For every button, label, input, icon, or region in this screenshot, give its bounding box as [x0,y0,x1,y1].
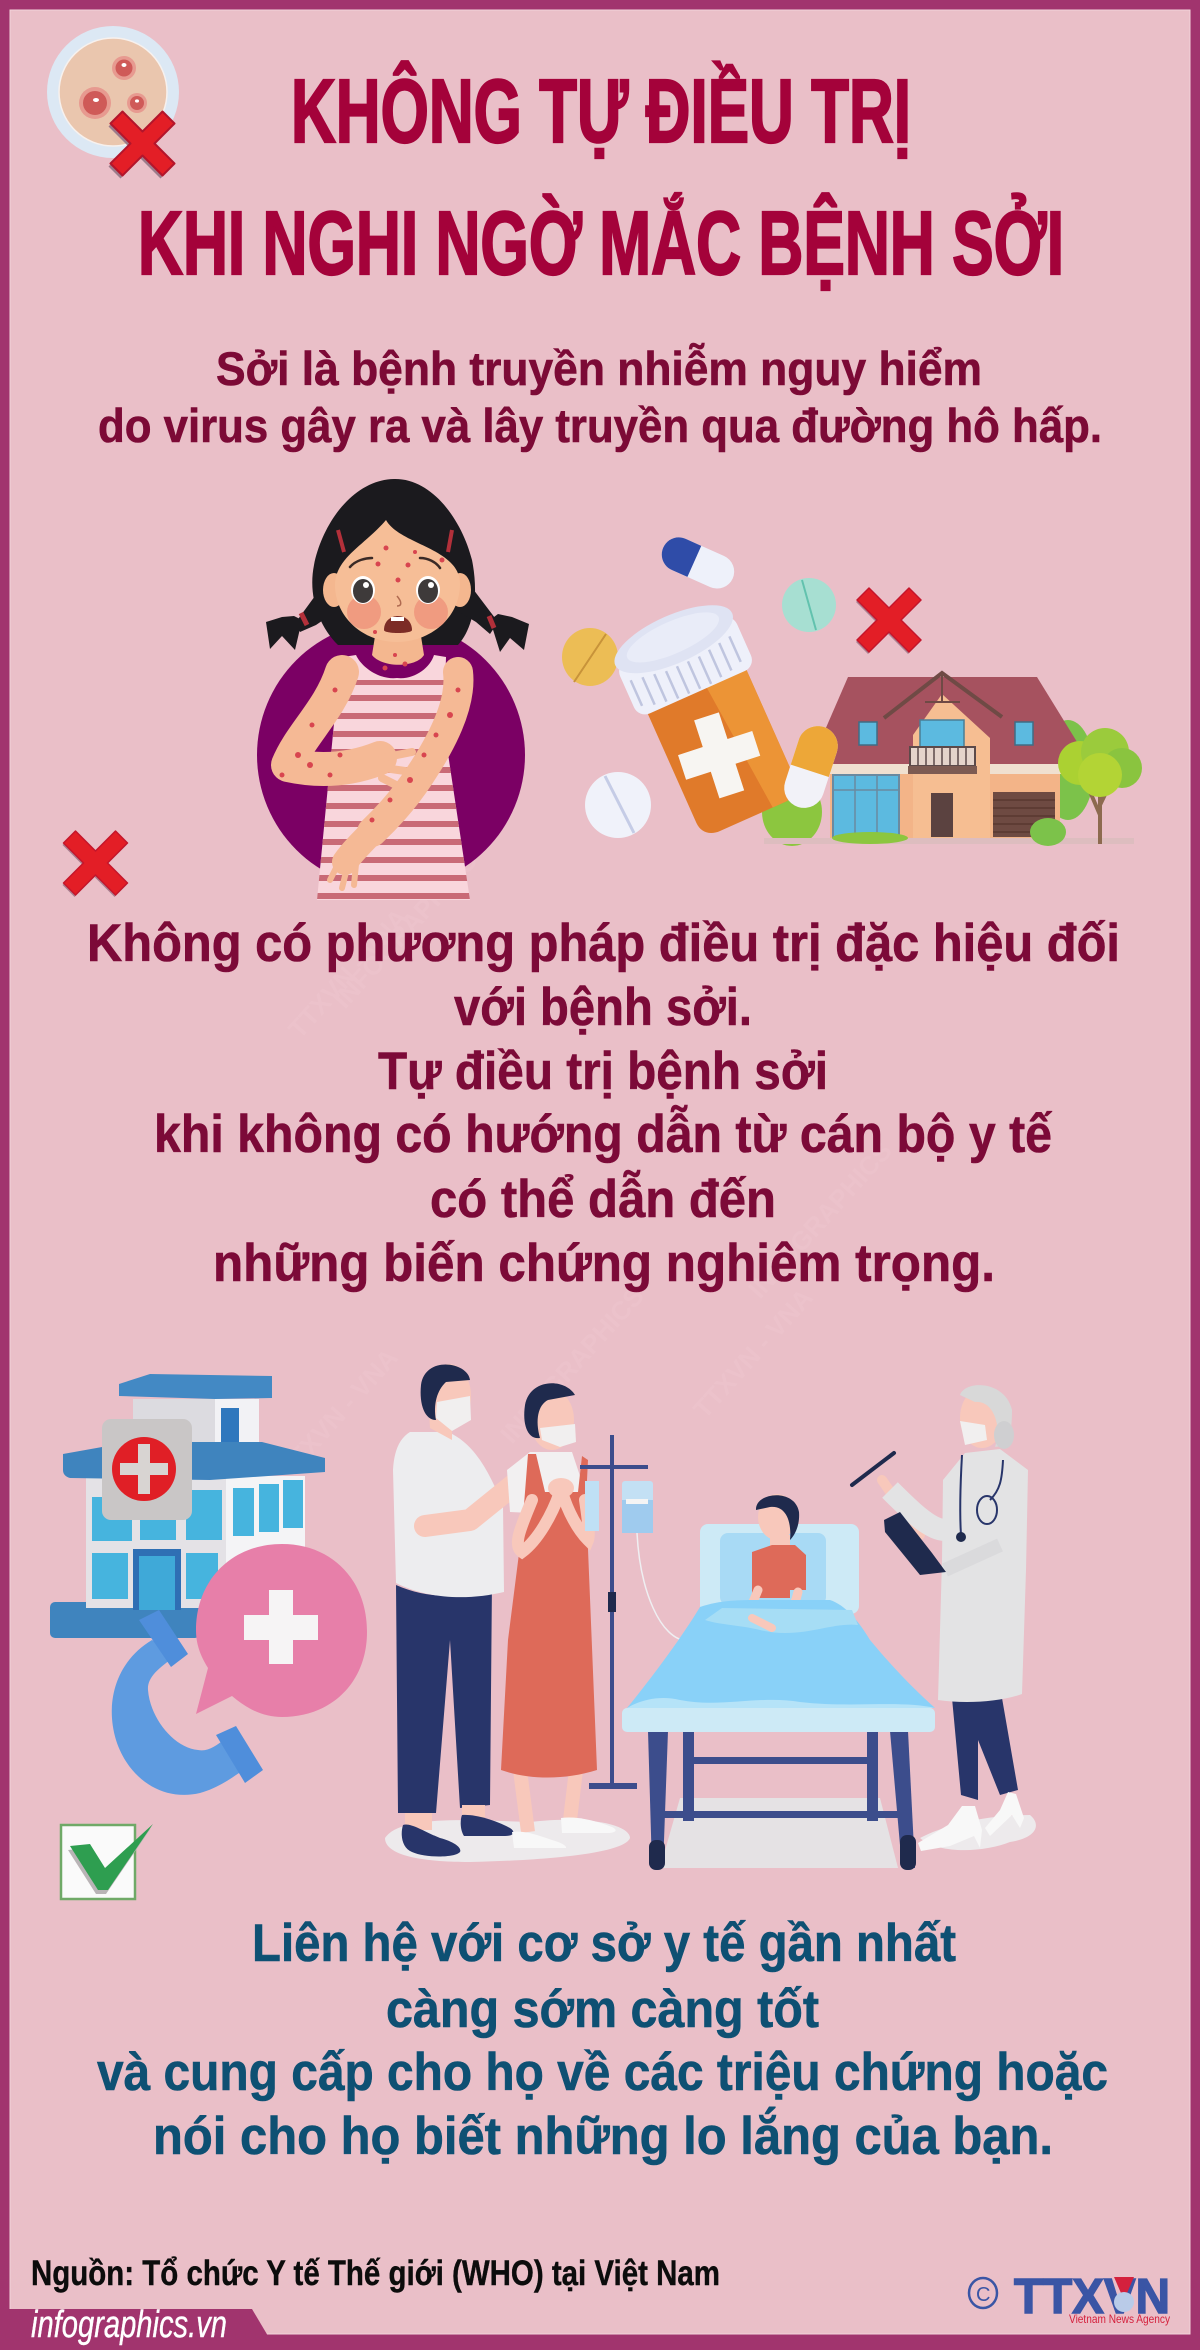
intro text: do virus gây ra và lây truyền qua đường hô hấp. [98,399,1102,452]
middle warning text: những biến chứng nghiêm trọng. [213,1234,995,1293]
illustration: child in hospital bed [622,1494,935,1870]
middle warning text [87,914,1120,1293]
woman blouse [507,1452,588,1515]
middle warning text: với bệnh sởi. [454,978,752,1037]
advice text [97,1914,1108,2166]
floor shadow [385,1820,630,1862]
illustration: hospital building [50,1374,325,1638]
floor shadow [660,1798,898,1868]
balcony [910,747,975,766]
woman head [530,1390,574,1450]
orange capsule [779,721,843,813]
advice text: và cung cấp cho họ về các triệu chứng hoặc [97,2043,1108,2102]
faint watermarks: TTXVN - VNA [282,902,414,1044]
face [335,520,460,642]
roof [812,677,1082,768]
neck and ears [372,630,424,665]
woman arms [518,1492,589,1552]
back bushes [1042,720,1094,820]
lab coat [938,1449,1028,1702]
windows [92,1480,303,1599]
illustration: house [762,673,1142,846]
footer tab: infographics.vn: infographics.vn [31,2304,227,2346]
walls [830,740,1060,844]
stethoscope [960,1455,1003,1535]
yellow pill [562,628,618,686]
middle warning text: khi không có hướng dẫn từ cán bộ y tế [154,1104,1052,1164]
man head [428,1395,452,1440]
arms [288,672,458,888]
front door [931,793,953,837]
faint watermarks: INFOGRAPHICS [327,846,483,1014]
icon: telephone handset [112,1610,263,1795]
logo: TTXVN: C [976,2284,990,2306]
title: KHÔNG TỰ ĐIỀU TRỊ [291,60,911,162]
clipboard [884,1512,946,1575]
advice text: nói cho họ biết những lo lắng của bạn. [153,2106,1053,2166]
pen [852,1453,894,1485]
illustration: parents with masks [385,1364,630,1862]
man pants [396,1580,492,1813]
middle warning text: có thể dẫn đến [430,1169,776,1229]
blue capsule [656,532,740,594]
intro text: Sởi là bệnh truyền nhiễm nguy hiểm [216,342,982,395]
icon: skin rash with red cross [47,26,179,178]
faint watermarks: INFOGRAPHICS [494,1281,650,1449]
base slab [50,1602,200,1638]
middle warning text: Tự điều trị bệnh sởi [378,1042,828,1101]
medicine bottle [605,591,811,842]
illustration: doctor with clipboard [852,1385,1036,1851]
woman legs [520,1770,576,1832]
advice text: Liên hệ với cơ sở y tế gần nhất [252,1914,956,1973]
woman shoes [512,1832,566,1848]
illustration: girl with measles rash [257,479,529,905]
purple circle backdrop [257,621,525,889]
rash spots [280,546,460,822]
faint watermarks: INFOGRAPHICS [742,1136,898,1304]
mattress [622,1708,935,1732]
icon: red cross left [62,831,128,897]
white pill [585,772,651,838]
illustration: IV drip stand [580,1435,733,1789]
shadow [920,1815,1036,1850]
upper window [920,720,964,750]
high heel shoes [918,1806,982,1851]
arm [882,1480,920,1535]
cross sign [102,1419,192,1520]
woman dress [501,1454,597,1778]
top roof [119,1374,272,1399]
icon: green check box [61,1824,153,1899]
small dormer windows [859,722,877,745]
icon: pink speech bubble with cross [196,1544,367,1717]
faint watermarks: TTXVN - VNA [272,1342,404,1484]
teal pill [782,578,836,632]
headboard and pillow [700,1524,859,1614]
faint watermarks: TTXVN - VNA [687,1282,819,1424]
central gable [913,694,990,843]
logo: TTXVN: Vietnam News Agency [1069,2312,1170,2326]
source line: Nguồn: Tổ chức Y tế Thế giới (WHO) tại Việt Nam [31,2254,720,2293]
head [960,1388,1004,1448]
bushes and base [764,838,1134,844]
big window [833,775,899,837]
trousers [952,1698,1018,1800]
red cross [856,588,921,654]
top band [824,764,1078,774]
logo: TTXVN: TTXVN [1014,2270,1170,2324]
illustration: pills and medicine bottle [562,532,921,842]
bed frame [648,1731,915,1868]
tree [1085,780,1112,844]
faint watermarks [272,846,898,1484]
man arm [425,1478,522,1526]
title [138,60,1064,294]
blanket [627,1600,935,1708]
man ankles [405,1805,485,1830]
hair and braids [266,479,529,652]
man shoes [402,1824,460,1856]
intro text [98,342,1102,452]
advice text: càng sớm càng tốt [386,1980,819,2039]
child [770,1535,790,1550]
middle warning text: Không có phương pháp điều trị đặc hiệu đối [87,914,1120,973]
garage door [993,792,1055,837]
door [133,1549,181,1610]
mid roof [63,1442,325,1480]
main body [86,1476,305,1608]
upper block [133,1399,259,1459]
man shirt [393,1432,504,1597]
